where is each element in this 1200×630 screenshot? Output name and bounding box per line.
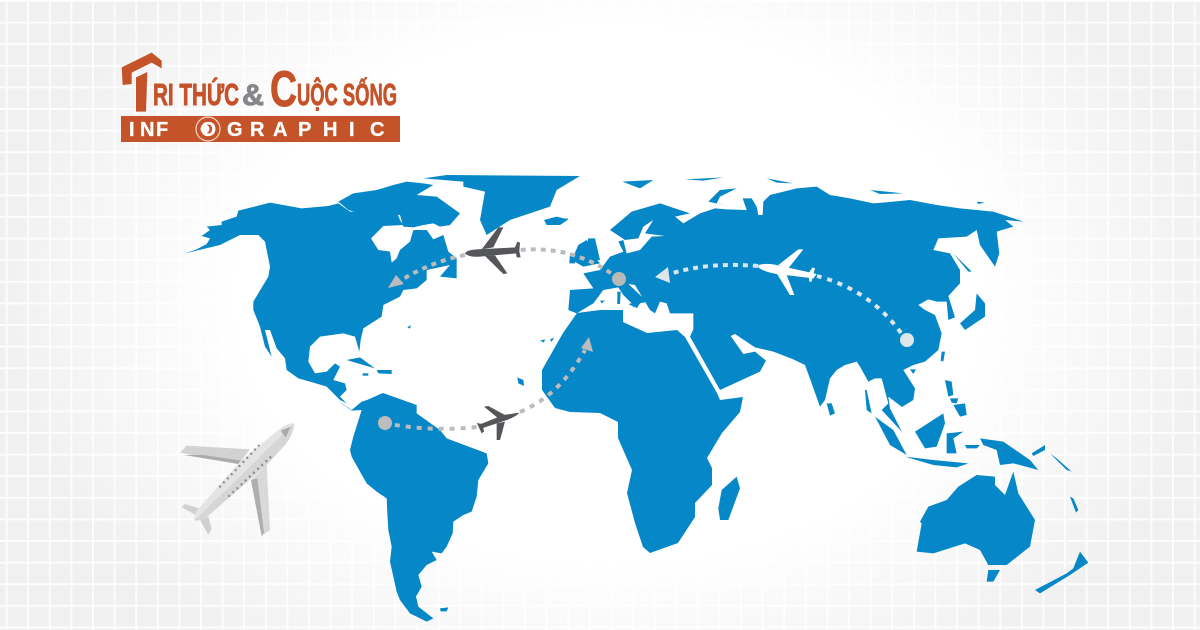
dot: Europe	[612, 272, 626, 286]
logo	[121, 53, 400, 142]
icon: large grey plane	[180, 423, 294, 536]
dot: China	[900, 333, 914, 347]
logo: wordmark: C	[270, 61, 297, 117]
dot: South America	[378, 416, 392, 430]
world map	[185, 175, 1088, 622]
icon: white plane over Asia	[758, 249, 817, 295]
arrowhead: Europe	[655, 267, 670, 283]
arrowhead: Africa	[581, 337, 593, 352]
route: Europe to North America	[388, 249, 626, 288]
icon: dark plane over Atlantic	[465, 227, 521, 274]
logo: roof T mark	[122, 53, 162, 112]
route: China to Europe	[655, 265, 914, 347]
logo: infographic band: INFOGRAPHIC	[129, 119, 384, 141]
logo: wordmark: UỘC SỐNG	[297, 76, 397, 112]
logo: wordmark: RI THỨC	[153, 76, 239, 112]
arrowhead: North America	[388, 275, 404, 288]
icon: small dark plane over South Atlantic	[477, 406, 519, 440]
logo: wordmark	[153, 61, 397, 117]
Southeast Asia, Oceania, Madagascar	[718, 380, 1088, 593]
Eurasia	[560, 177, 1023, 432]
Africa	[542, 310, 743, 553]
route: South America to Africa	[378, 337, 593, 430]
North America and Greenland	[185, 175, 600, 408]
logo: wordmark: &	[242, 79, 264, 112]
South America	[337, 393, 488, 622]
